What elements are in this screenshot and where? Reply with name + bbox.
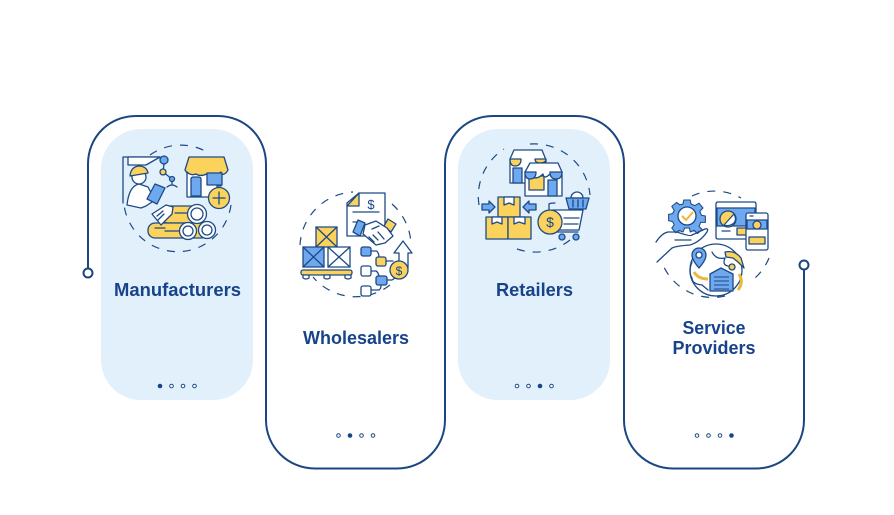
heading: service providers: Providers — [672, 338, 756, 358]
pagination: step 4 — [695, 433, 734, 438]
icon: manufacturers — [123, 145, 231, 252]
start node — [84, 268, 92, 278]
icon: wholesalers — [300, 192, 412, 297]
icon: retailers: $ — [546, 214, 554, 230]
heading: service providers: Service — [682, 318, 746, 338]
heading: wholesalers: Wholesalers — [303, 328, 409, 348]
icon: service providers — [656, 191, 769, 297]
connecting outline — [88, 116, 804, 468]
end node — [800, 260, 808, 270]
heading: manufacturers: Manufacturers — [114, 280, 241, 300]
pagination: step 2 — [337, 433, 375, 438]
panel: retailers background — [458, 129, 610, 400]
pagination: step 1 — [158, 384, 196, 388]
pagination: step 3 — [515, 384, 553, 388]
panel: manufacturers background — [101, 129, 253, 400]
icon: retailers — [478, 144, 590, 252]
icon: wholesalers: $ — [367, 197, 375, 212]
heading: service providers — [672, 318, 756, 358]
heading: retailers: Retailers — [496, 280, 573, 300]
icon: wholesalers: $ — [396, 264, 403, 278]
